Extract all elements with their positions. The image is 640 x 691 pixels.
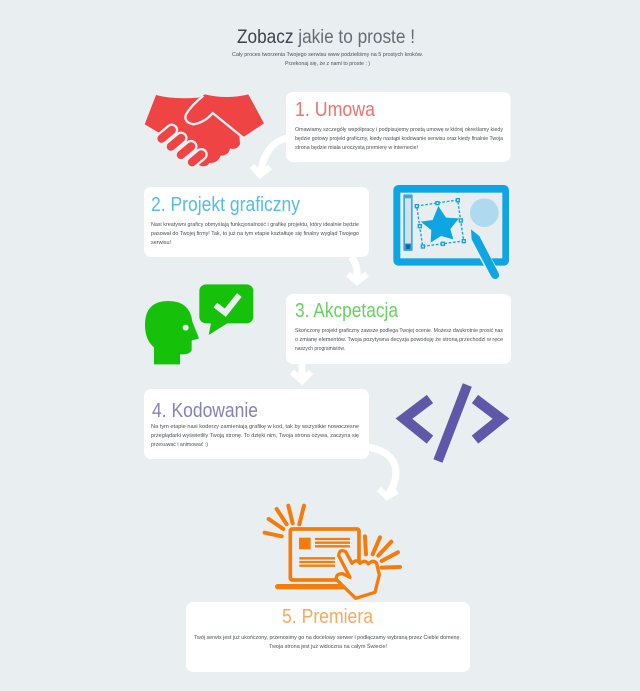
text: step 3 description: naszych programistów. xyxy=(295,346,345,352)
text: step 2 description xyxy=(151,222,360,246)
icon: laptop with clicking hand xyxy=(265,506,400,598)
title: Zobacz jakie to proste ! xyxy=(237,26,415,48)
panel: step 2 xyxy=(144,187,369,257)
subtitle: Przekonaj się, że z nami to proste : ) xyxy=(285,61,370,67)
text: step 1 description: będzie gotowy projekt graficzny, kiedy nastąpi kodowanie serwisu oraz kiedy finalnie Twoja xyxy=(295,136,504,142)
arrow: step 2 to step 3 xyxy=(348,257,367,282)
text: step 4 description: przeglądarki wyświetlily Twoją stronę. To dzięki nim, Twoja strona ożywa, zaczyna się xyxy=(151,433,360,439)
panel: step 3 xyxy=(286,294,511,364)
icon: head with speech bubble xyxy=(145,284,253,364)
heading: 4. Kodowanie: 4. Kodowanie xyxy=(152,400,258,422)
heading: 5. Premiera: 5. Premiera xyxy=(282,606,374,628)
arrow: step 3 to step 4 xyxy=(292,363,311,381)
heading: 3. Akcpetacja: 3. Akcpetacja xyxy=(295,300,399,322)
heading: 1. Umowa: 1. Umowa xyxy=(295,99,376,121)
heading: 2. Projekt graficzny: 2. Projekt graficzny xyxy=(151,194,300,216)
panel: step 1 xyxy=(286,92,510,162)
text: step 5 description: Twój serwis jest już ukończony, przenosimy go na docelowy serwer i podłączamy wybraną przez Ciebie domenę. xyxy=(194,635,461,641)
text: step 5 description xyxy=(194,635,461,650)
subtitle xyxy=(232,52,423,67)
icon: code brackets xyxy=(404,385,501,461)
panel: step 4 xyxy=(144,389,369,459)
text: step 4 description: Na tym etapie nasi koderzy zamieniają grafikę w kod, tak by wszystkie nowoczesne xyxy=(151,424,360,430)
text: step 2 description: serwisu! xyxy=(151,240,171,246)
text: step 2 description: Nasi kreatywni graficy obmyślają funkcjonalność i grafikę projektu, który idealnie będzie xyxy=(151,222,360,228)
icon: handshake xyxy=(145,94,264,170)
subtitle: Cały proces tworzenia Twojego serwisu www podzieliśmy na 5 prostych kroków. xyxy=(232,52,423,58)
text: step 4 description: przesuwać i animować :) xyxy=(151,442,208,448)
icon: tablet with star xyxy=(393,185,509,279)
text: step 1 description xyxy=(295,127,504,151)
text: step 1 description: strona będzie miała uroczystą premierę w internecie! xyxy=(295,145,418,151)
text: step 1 description: Omawiamy szczegóły współpracy i podpisujemy prostą umowę w której określamy kiedy xyxy=(295,127,503,133)
arrow: step 1 to step 2 xyxy=(252,138,287,175)
text: step 3 description: o zmianę elementów. Twoja pozytywna decyzja powoduję że stroną przechodzi w ręce xyxy=(295,337,504,343)
text: step 3 description: Skończony projekt graficzny zawsze podlega Twojej ocenie. Możesz dwukrotnie prosić nas xyxy=(295,328,503,334)
text: step 5 description: Twoja strona jest już widoczna na całym Świecie! xyxy=(269,642,387,650)
text: step 3 description xyxy=(295,328,504,352)
text: step 2 description: pasował do Twojej firmy! Tak, to już na tym etapie kształtuje się finalny wygląd Twojego xyxy=(151,231,360,237)
arrow: step 4 to step 5 xyxy=(368,447,397,497)
text: step 4 description xyxy=(151,424,360,448)
panel: step 5 xyxy=(186,602,470,672)
